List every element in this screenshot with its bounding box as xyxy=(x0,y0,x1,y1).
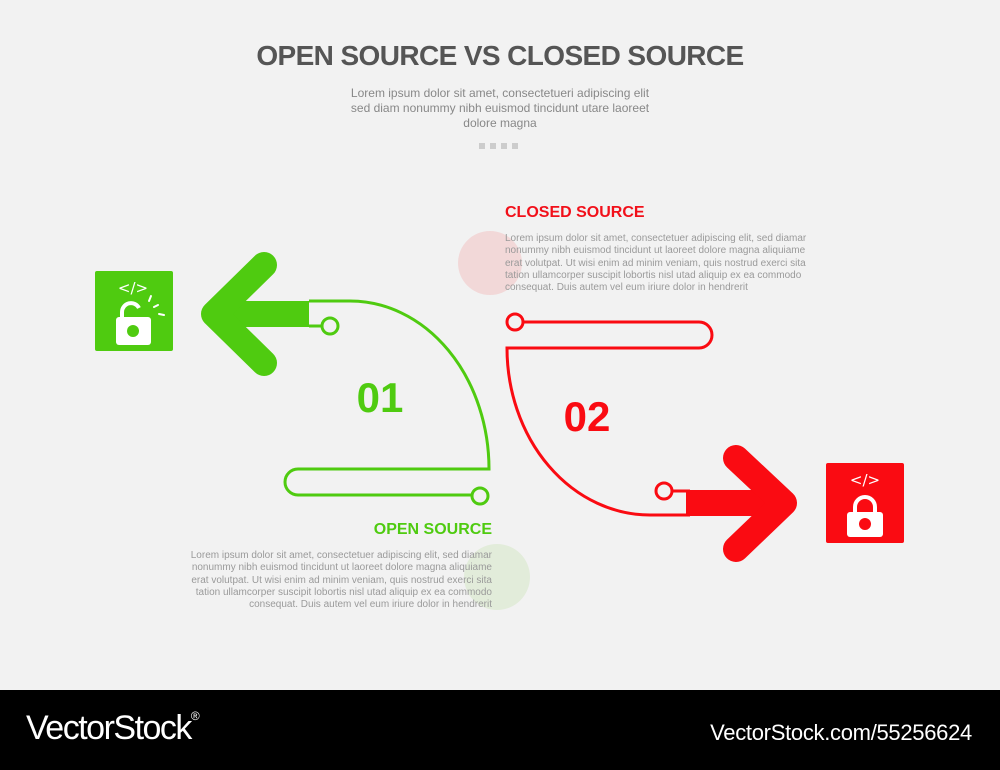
decorative circles xyxy=(458,231,522,295)
red arrow xyxy=(686,458,784,549)
icon: unlocked padlock: </> xyxy=(118,279,148,297)
label 01: 01 xyxy=(357,374,403,421)
heading: closed source: CLOSED SOURCE xyxy=(505,204,645,221)
red path xyxy=(507,314,712,515)
label 02: 02 xyxy=(564,393,610,440)
footer url: VectorStock.com/55256624 xyxy=(710,720,972,745)
title: OPEN SOURCE VS CLOSED SOURCE xyxy=(256,40,744,71)
icon: locked padlock: </> xyxy=(850,471,880,489)
footer logo: VectorStock® xyxy=(26,709,198,747)
green arrow xyxy=(214,265,309,363)
dots xyxy=(479,143,521,149)
green path xyxy=(285,301,489,504)
icon: locked padlock xyxy=(826,463,904,543)
icon: unlocked padlock xyxy=(95,271,173,351)
text: open source: Lorem ipsum dolor sit amet, consectetuer adipiscing elit, sed diamar nonummy nibh euismod tincidunt ut laoreet dolore magna aliquiame erat volutpat. Ut wisi enim ad minim veniam, quis nostrud exerci sita tation ullamcorper suscipit lobortis nisl utad aliquip ex ea commodo consequat. Duis autem vel eum iriure dolor in hendrerit xyxy=(191,550,492,610)
text: closed source: Lorem ipsum dolor sit amet, consectetuer adipiscing elit, sed diamar nonummy nibh euismod tincidunt ut laoreet dolore magna aliquiame erat volutpat. Ut wisi enim ad minim veniam, quis nostrud exerci sita tation ullamcorper suscipit lobortis nisl utad aliquip ex ea commodo consequat. Duis autem vel eum iriure dolor in hendrerit xyxy=(505,233,806,293)
heading: open source: OPEN SOURCE xyxy=(374,521,492,538)
footer bar xyxy=(0,690,1000,770)
subtitle: Lorem ipsum dolor sit amet, consectetueri adipiscing elit sed diam nonummy nibh euismod tincidunt utare laoreet dolore magna xyxy=(351,86,649,130)
